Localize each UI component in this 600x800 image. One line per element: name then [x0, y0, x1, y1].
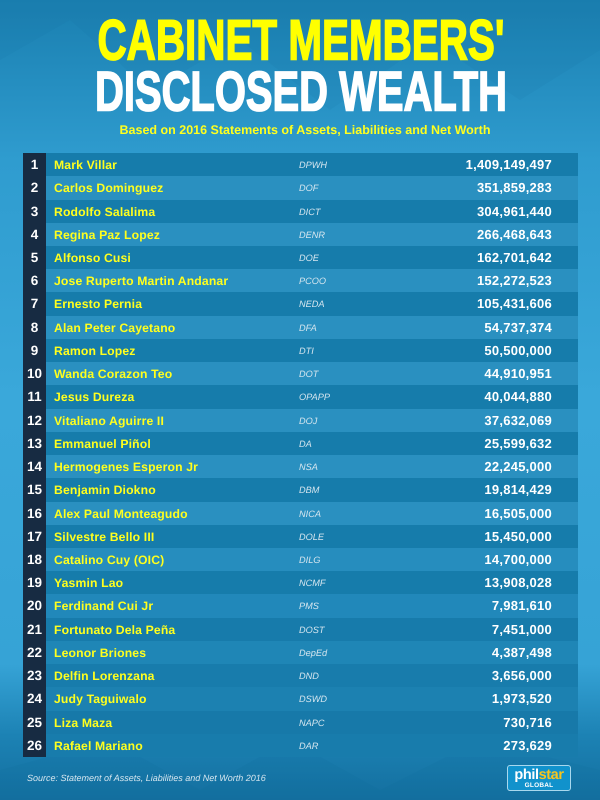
- row 22: Leonor Briones: [54, 646, 146, 660]
- row 17: 15,450,000: [484, 529, 552, 544]
- row 25: Liza Maza: [54, 716, 112, 730]
- row 15: DBM: [299, 485, 319, 495]
- row 6: Jose Ruperto Martin Andanar: [54, 274, 228, 288]
- row 6: PCOO: [299, 276, 326, 286]
- row 25: NAPC: [299, 718, 325, 728]
- row 3: DICT: [299, 206, 320, 216]
- row 21: 7,451,000: [492, 622, 552, 637]
- row 5: [23, 246, 578, 270]
- row 9: [23, 339, 578, 363]
- row 23: [23, 664, 578, 688]
- row 24: DSWD: [299, 694, 327, 704]
- row 17: [23, 525, 578, 549]
- row 15: 19,814,429: [484, 482, 552, 497]
- row 17: DOLE: [299, 532, 324, 542]
- row 10: Wanda Corazon Teo: [54, 367, 172, 381]
- row 20: 7,981,610: [492, 598, 552, 613]
- row 11: [23, 385, 578, 409]
- row 21: [23, 618, 578, 642]
- logo: philstar global: GLOBAL: [525, 782, 553, 789]
- row 4: DENR: [299, 230, 325, 240]
- row 3: 304,961,440: [477, 204, 552, 218]
- logo: philstar global: philstar: [514, 767, 564, 783]
- row 22: 4,387,498: [492, 645, 552, 660]
- row 26: Rafael Mariano: [54, 739, 143, 753]
- row 17: Silvestre Bello III: [54, 530, 154, 544]
- row 18: 14,700,000: [484, 552, 552, 567]
- row 14: [23, 455, 578, 479]
- row 19: Yasmin Lao: [54, 576, 123, 590]
- row 19: [23, 571, 578, 595]
- row 22: [23, 641, 578, 665]
- row 7: 7: [31, 296, 38, 311]
- row 24: 1,973,520: [492, 691, 552, 706]
- row 21: Fortunato Dela Peña: [54, 623, 175, 637]
- row 11: 40,044,880: [484, 389, 552, 404]
- row 19: NCMF: [299, 578, 326, 588]
- row 3: 3: [31, 204, 38, 218]
- row 23: 3,656,000: [492, 668, 552, 683]
- row 17: 17: [27, 529, 42, 544]
- row 4: 266,468,643: [477, 227, 552, 242]
- row 14: 22,245,000: [484, 459, 552, 474]
- row 2: 351,859,283: [477, 180, 552, 195]
- row 12: 12: [27, 412, 42, 428]
- row 21: 21: [27, 622, 42, 637]
- row 1: Mark Villar: [54, 158, 117, 172]
- logo: philstar global: [507, 765, 571, 791]
- row 5: Alfonso Cusi: [54, 251, 131, 265]
- row 22: 22: [27, 645, 42, 660]
- row 25: 25: [27, 714, 42, 730]
- row 8: 8: [31, 320, 38, 335]
- row 12: 37,632,069: [484, 412, 552, 428]
- row 6: 6: [31, 273, 38, 288]
- row 8: Alan Peter Cayetano: [54, 321, 175, 335]
- row 8: DFA: [299, 323, 317, 333]
- row 18: Catalino Cuy (OIC): [54, 553, 164, 567]
- row 12: Vitaliano Aguirre II: [54, 414, 164, 428]
- row 9: 50,500,000: [484, 343, 552, 358]
- row 13: 25,599,632: [484, 436, 552, 451]
- row 16: 16: [27, 506, 42, 520]
- row 2: DOF: [299, 183, 318, 193]
- row 1: 1,409,149,497: [466, 157, 552, 172]
- row 16: Alex Paul Monteagudo: [54, 506, 188, 520]
- row 1: DPWH: [299, 160, 327, 170]
- row 18: 18: [27, 552, 42, 567]
- row 13: 13: [27, 436, 42, 451]
- row 14: NSA: [299, 462, 318, 472]
- row 14: 14: [27, 459, 42, 474]
- row 14: Hermogenes Esperon Jr: [54, 460, 198, 474]
- row 4: Regina Paz Lopez: [54, 228, 160, 242]
- row 18: DILG: [299, 555, 320, 565]
- row 10: [23, 362, 578, 386]
- row 8: 54,737,374: [484, 320, 552, 335]
- row 16: [23, 502, 578, 526]
- row 19: 19: [27, 575, 42, 590]
- row 7: 105,431,606: [477, 296, 552, 311]
- row 20: PMS: [299, 601, 319, 611]
- row 24: 24: [27, 691, 42, 706]
- row 2: [23, 176, 578, 200]
- row 22: DepEd: [299, 648, 327, 658]
- row 6: 152,272,523: [477, 273, 552, 288]
- row 24: [23, 687, 578, 711]
- row 7: NEDA: [299, 299, 325, 309]
- row 2: Carlos Dominguez: [54, 181, 163, 195]
- row 15: [23, 478, 578, 502]
- row 4: 4: [31, 227, 38, 242]
- row 20: 20: [27, 598, 42, 613]
- row 3: [23, 200, 578, 224]
- row 16: NICA: [299, 508, 321, 518]
- row 13: Emmanuel Piñol: [54, 437, 151, 451]
- row 9: Ramon Lopez: [54, 344, 136, 358]
- row 2: 2: [31, 180, 38, 195]
- row 20: Ferdinand Cui Jr: [54, 599, 153, 613]
- row 20: [23, 594, 578, 618]
- row 26: [23, 734, 578, 757]
- row 5: 5: [31, 250, 38, 265]
- row 3: Rodolfo Salalima: [54, 204, 155, 218]
- row 23: DND: [299, 671, 319, 681]
- row 15: Benjamin Diokno: [54, 483, 156, 497]
- row 12: DOJ: [299, 416, 317, 426]
- row 1: [23, 153, 578, 177]
- subtitle: Based on 2016 Statements of Assets, Liabilities and Net Worth: [120, 123, 490, 137]
- row 16: 16,505,000: [484, 506, 552, 520]
- row 23: Delfin Lorenzana: [54, 669, 155, 683]
- row 4: [23, 223, 578, 247]
- row 6: [23, 269, 578, 293]
- row 25: 730,716: [503, 714, 552, 730]
- row 10: DOT: [299, 369, 318, 379]
- row 15: 15: [27, 482, 42, 497]
- row 26: DAR: [299, 741, 318, 751]
- title: [95, 8, 507, 120]
- row 9: 9: [31, 343, 38, 358]
- row 24: Judy Taguiwalo: [54, 692, 147, 706]
- row 7: Ernesto Pernia: [54, 297, 142, 311]
- row 26: 26: [27, 738, 42, 753]
- row 13: [23, 432, 578, 456]
- row 10: 44,910,951: [484, 366, 552, 381]
- row 10: 10: [27, 366, 42, 381]
- row 5: DOE: [299, 253, 319, 263]
- row 19: 13,908,028: [484, 575, 552, 590]
- row 13: DA: [299, 439, 312, 449]
- row 12: [23, 408, 578, 432]
- row 1: 1: [31, 157, 38, 172]
- row 8: [23, 316, 578, 340]
- source note: Source: Statement of Assets, Liabilities and Net Worth 2016: [27, 773, 266, 783]
- row 11: 11: [27, 389, 42, 404]
- row 21: DOST: [299, 625, 325, 635]
- row 11: Jesus Dureza: [54, 390, 134, 404]
- row 25: [23, 710, 578, 734]
- row 11: OPAPP: [299, 392, 330, 402]
- row 18: [23, 548, 578, 572]
- row 23: 23: [27, 668, 42, 683]
- row 26: 273,629: [503, 738, 552, 753]
- row 5: 162,701,642: [477, 250, 552, 265]
- row 9: DTI: [299, 346, 314, 356]
- row 7: [23, 292, 578, 316]
